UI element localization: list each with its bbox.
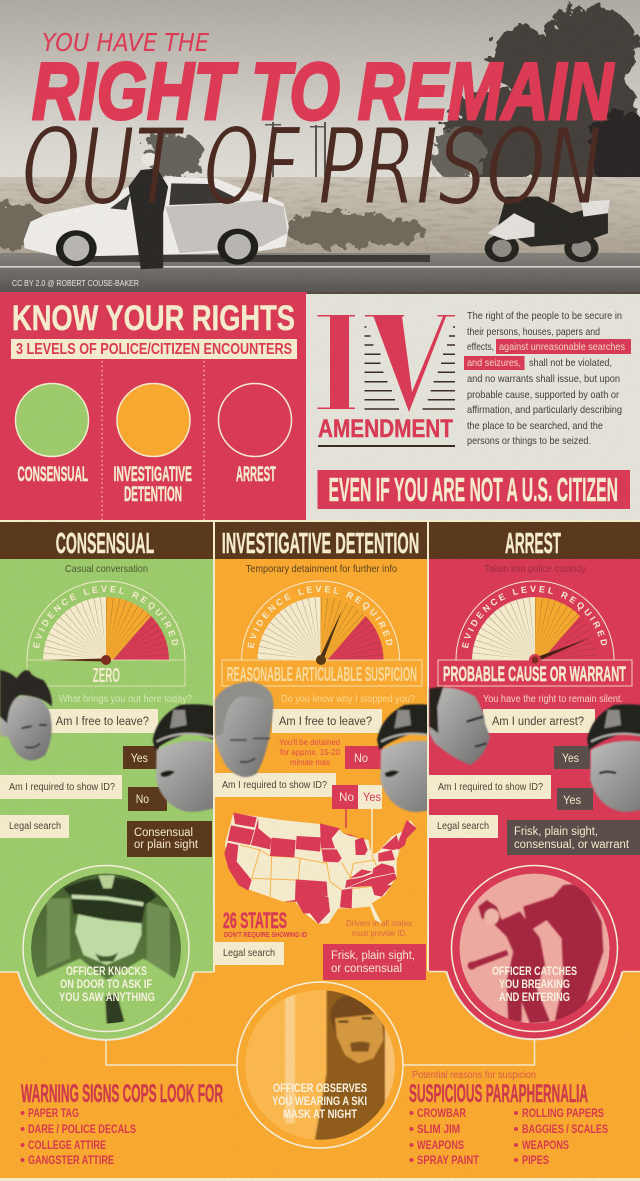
list: warning signs: GANGSTER ATTIRE [28, 1153, 114, 1167]
caption: OFFICER OBSERVES [273, 1081, 367, 1095]
caption: AND ENTERING [499, 990, 570, 1004]
legal search [429, 815, 498, 838]
officer question: Do you know why I stopped you? [281, 694, 415, 705]
large tree at right [432, 6, 640, 190]
title line 1: YOU HAVE THE [42, 28, 209, 57]
list: suspicious paraphernalia: ROLLING PAPERS [522, 1106, 604, 1120]
answer no: No [136, 794, 149, 806]
portrait: officer, arrest [587, 704, 640, 812]
caption: YOU BREAKING [499, 977, 570, 991]
amendment text: their persons, houses, papers and [467, 326, 600, 338]
level: investigative detention [114, 384, 192, 506]
legal search [214, 942, 284, 965]
speech box [272, 709, 382, 733]
circle: officer catches [444, 858, 626, 1040]
list: suspicious paraphernalia: WEAPONS [522, 1138, 569, 1152]
amendment text: affirmation, and particularly describing [467, 404, 622, 416]
outcome [323, 944, 426, 980]
id question: Am I required to show ID? [438, 782, 543, 793]
column header: arrest: ARREST [505, 528, 561, 560]
subtitle: arrest: Taken into police custody [484, 564, 586, 575]
level: consensual [16, 384, 88, 486]
answers no and yes: Yes [363, 792, 381, 804]
answer yes [557, 788, 593, 810]
legal search: Legal search [9, 821, 61, 832]
panel: know your rights: CONSENSUAL [18, 463, 88, 486]
car [24, 177, 289, 266]
officer statement: You have the right to remain silent. [483, 694, 623, 705]
drivers note: Drivers in all states [346, 919, 412, 928]
list: suspicious paraphernalia: BAGGIES / SCALES [522, 1122, 608, 1136]
caption: OFFICER CATCHES [492, 964, 577, 978]
detention note [279, 738, 341, 767]
list: warning signs: DARE / POLICE DECALS [28, 1122, 136, 1136]
page lower background [0, 520, 640, 1181]
connector lines [106, 1032, 534, 1065]
photo: smiling officer [31, 874, 181, 1024]
level: investigative detention: DETENTION [124, 483, 182, 506]
portrait: officer, consensual [152, 703, 213, 812]
outcome: consensual, or warrant [514, 839, 630, 851]
amendment text: and seizures, [467, 357, 521, 369]
title [22, 28, 614, 230]
credit line: CC BY 2.0 @ ROBERT COUSE-BAKER [12, 279, 139, 288]
list: suspicious paraphernalia: WEAPONS [417, 1138, 464, 1152]
title line 3: OF [204, 106, 301, 230]
title line 3 [22, 106, 602, 230]
caption: MASK AT NIGHT [283, 1107, 358, 1121]
subtitle: consensual: Casual conversation [65, 564, 148, 575]
drivers note [346, 919, 412, 938]
portrait: citizen, arrest [429, 687, 490, 765]
caption [59, 964, 155, 1004]
panel: fourth amendment [306, 294, 640, 522]
answers no and yes [332, 785, 382, 855]
outcome: or consensual [331, 963, 402, 975]
column header: investigative detention [215, 522, 427, 560]
amendment text [464, 310, 631, 447]
list: warning signs: PAPER TAG [28, 1106, 79, 1120]
id question [215, 773, 336, 797]
officer [129, 153, 168, 269]
roman numeral IV [318, 315, 455, 412]
column header: investigative detention: INVESTIGATIVE DETENTION [222, 528, 419, 560]
list: suspicious paraphernalia: CROWBAR [417, 1106, 466, 1120]
answer yes [554, 746, 590, 769]
list: suspicious paraphernalia [409, 1070, 608, 1167]
circle: officer observes [237, 982, 405, 1148]
gauge: consensual, zero [26, 580, 186, 687]
answers no and yes: No [339, 792, 354, 804]
detention note: You'll be detained [279, 738, 340, 747]
amendment text: the place to be searched, and the [467, 420, 603, 432]
caption: OFFICER KNOCKS [66, 964, 147, 978]
legal search [0, 815, 69, 838]
amendment text: probable cause, supported by oath or [467, 389, 619, 401]
text: REASONABLE ARTICULABLE SUSPICION [227, 664, 417, 686]
amendment text: effects, [467, 341, 494, 353]
level: arrest [218, 384, 292, 486]
answer yes [123, 746, 159, 769]
map: states not requiring ID [224, 813, 417, 924]
column header: consensual [0, 522, 213, 560]
detention note: for approx. 15-20 [280, 748, 341, 757]
statistic: 26 states: DON'T REQUIRE SHOWING ID [224, 930, 307, 939]
list: suspicious paraphernalia: SPRAY PAINT [417, 1153, 480, 1167]
id question: Am I required to show ID? [9, 782, 115, 793]
amendment text: The right of the people to be secure in [467, 310, 622, 322]
answer yes: Yes [563, 795, 581, 807]
subheading banner: 3 LEVELS OF POLICE/CITIZEN ENCOUNTERS [16, 341, 292, 358]
outcome [127, 821, 212, 857]
gauge: investigative detention, reasonable articulable suspicion [222, 580, 422, 686]
list: warning signs [20, 1080, 223, 1167]
column header: arrest [429, 522, 640, 560]
list: suspicious paraphernalia: Potential reasons for suspicion [412, 1070, 536, 1081]
caption [272, 1081, 367, 1121]
detention note: minute max [290, 758, 330, 767]
gauge: consensual, zero: ZERO [93, 665, 120, 687]
id question [0, 775, 122, 799]
id question [429, 775, 551, 799]
outcome: or plain sight [134, 839, 199, 851]
list: suspicious paraphernalia: SLIM JIM [417, 1122, 460, 1136]
portrait: citizen, investigative detention [215, 682, 273, 777]
gauge: arrest, probable cause or warrant [438, 580, 632, 686]
roadside bushes [0, 203, 426, 248]
heading: KNOW YOUR RIGHTS [12, 299, 295, 338]
text: WARNING SIGNS COPS LOOK FOR [21, 1080, 223, 1108]
hero photo: traffic stop [0, 0, 640, 294]
flow: consensual [0, 694, 212, 857]
answer yes: Yes [562, 753, 579, 765]
outcome: Frisk, plain sight, [331, 950, 415, 962]
outcome: Consensual [134, 827, 193, 839]
amendment label: AMENDMENT [318, 415, 453, 443]
id question: Am I required to show ID? [222, 780, 327, 791]
gauge: arrest, probable cause or warrant: EVIDENCE LEVEL REQUIRED [462, 586, 607, 648]
portrait: officer, investigative detention [376, 703, 427, 813]
answer yes: Yes [131, 753, 148, 765]
title line 3: OUT [22, 106, 185, 230]
photo: man in ski mask [245, 990, 405, 1140]
answer no [345, 746, 383, 769]
answer no [128, 787, 167, 811]
photo: burglar and officer [460, 874, 610, 1024]
column header: consensual: CONSENSUAL [56, 528, 154, 560]
statistic: 26 states [223, 908, 307, 939]
speech box: Am I free to leave? [56, 716, 149, 728]
speech box [483, 709, 595, 733]
motorcycle [485, 197, 610, 262]
panel: know your rights: INVESTIGATIVE [114, 463, 192, 486]
outcome [507, 820, 640, 855]
amendment text: shall not be violated, [529, 357, 612, 369]
list: warning signs: COLLEGE ATTIRE [28, 1138, 106, 1152]
legal search: Legal search [223, 948, 275, 959]
speech box: Am I under arrest? [492, 716, 584, 728]
panel: know your rights [0, 294, 306, 522]
statistic: 26 states: 26 STATES [223, 908, 287, 933]
amendment text: persons or things to be seized. [467, 435, 591, 447]
flow: arrest [429, 694, 640, 855]
gauge: investigative detention, reasonable articulable suspicion: EVIDENCE LEVEL REQUIRED [247, 586, 392, 648]
drivers note: must provide ID. [352, 929, 407, 938]
speech box [48, 709, 158, 733]
amendment text: and no warrants shall issue, but upon [467, 373, 620, 385]
speech box: Am I free to leave? [279, 716, 372, 728]
legal search: Legal search [437, 821, 489, 832]
caption [492, 964, 577, 1004]
circle: officer knocks [15, 858, 197, 1040]
gauge: consensual, zero: EVIDENCE LEVEL REQUIRED [32, 586, 178, 648]
caption: YOU WEARING A SKI [272, 1094, 367, 1108]
list: suspicious paraphernalia: PIPES [522, 1153, 549, 1167]
flow: investigative detention [214, 694, 426, 980]
caption: ON DOOR TO ASK IF [60, 977, 152, 991]
officer question: What brings you out here today? [59, 694, 192, 705]
level: arrest: ARREST [236, 463, 276, 486]
subtitle: investigative detention: Temporary detainment for further info [246, 564, 397, 575]
caption: YOU SAW ANYTHING [59, 990, 155, 1004]
portrait: citizen, consensual [0, 670, 52, 760]
small tree and utility poles [145, 122, 326, 185]
outcome: Frisk, plain sight, [514, 826, 598, 838]
answer no: No [354, 753, 368, 765]
